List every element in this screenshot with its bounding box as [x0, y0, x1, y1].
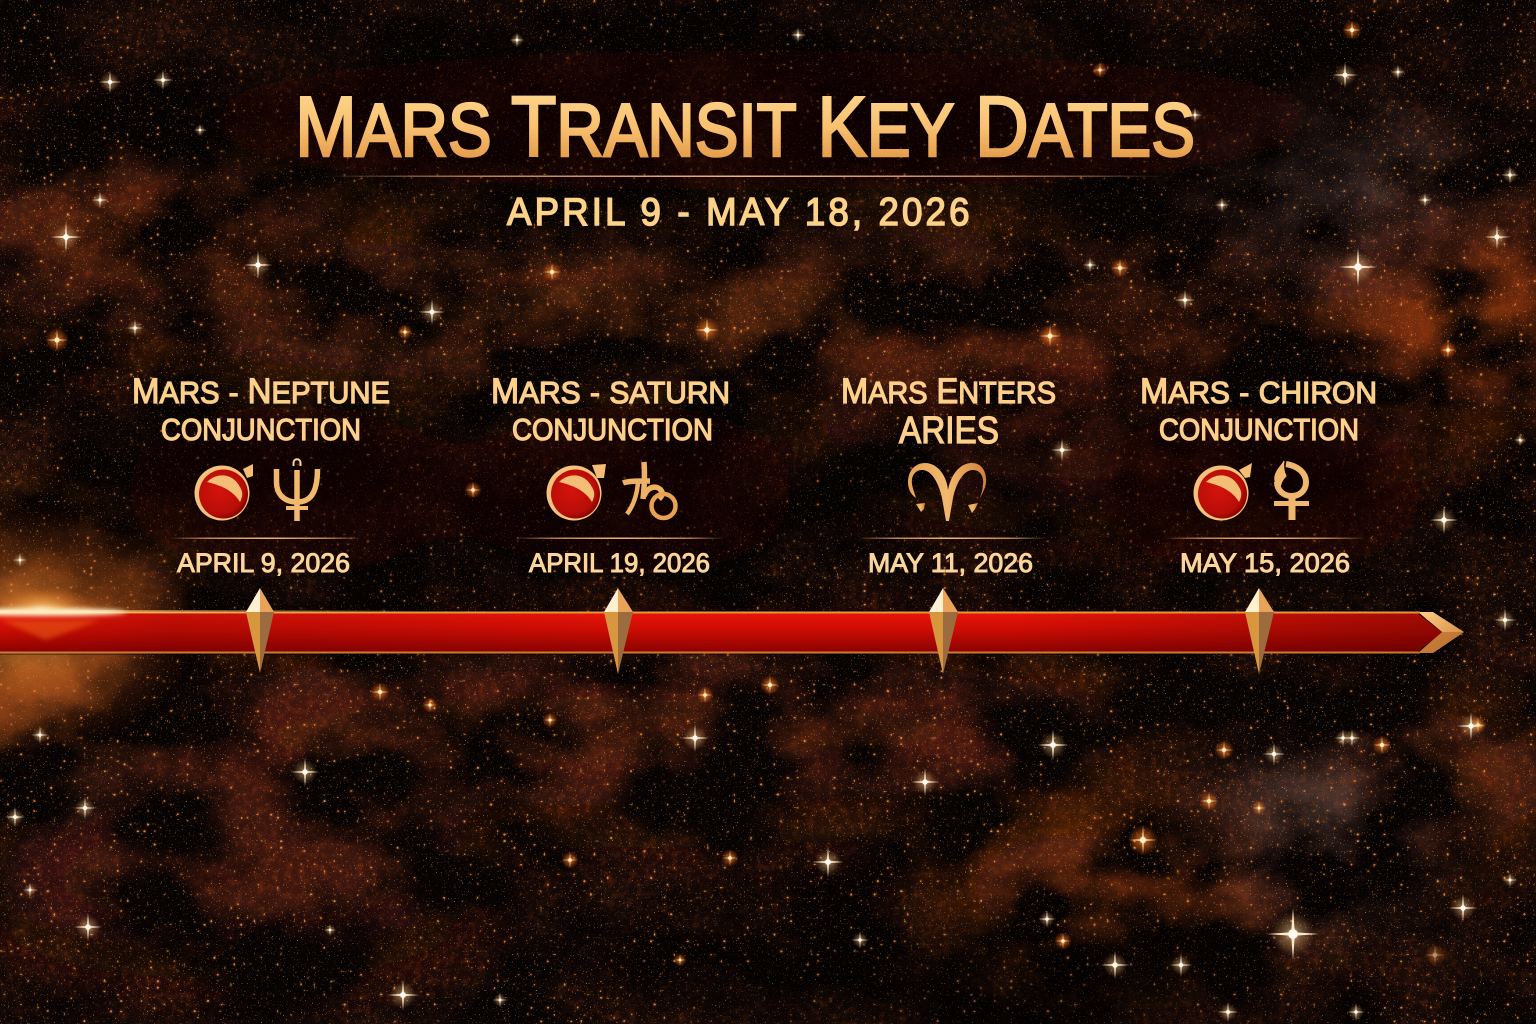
divider: [1165, 538, 1365, 539]
icon: Neptune trident: [276, 459, 318, 521]
heading: Mars - Chiron conjunction: [1140, 372, 1377, 447]
heading: Mars enters Aries: [841, 372, 1056, 452]
heading: Mars - Saturn conjunction: [491, 372, 730, 447]
heading: Mars enters Aries: MARS ENTERS: [841, 372, 1056, 411]
divider: [170, 538, 362, 539]
heading: Mars enters Aries: ARIES: [899, 410, 999, 452]
icon: Mars symbol: [1194, 463, 1252, 520]
heading: Mars - Saturn conjunction: MARS - SATURN: [491, 372, 730, 411]
marker: [1245, 588, 1274, 674]
icon: Mars symbol: [194, 464, 253, 520]
divider: [858, 538, 1046, 539]
heading: Mars - Saturn conjunction: CONJUNCTION: [512, 412, 713, 447]
milestone 4: Mars - Chiron: [1140, 372, 1377, 674]
heading: Mars - Neptune conjunction: MARS - NEPTUNE: [132, 372, 390, 411]
date: MAY 11, 2026: [868, 548, 1033, 578]
timeline arrow bar: [0, 608, 1464, 655]
heading: Mars - Neptune conjunction: [132, 372, 390, 447]
date: APRIL 9, 2026: [177, 548, 350, 578]
icon: Chiron symbol: [1274, 461, 1309, 520]
divider: [516, 538, 724, 539]
date: MAY 15, 2026: [1180, 548, 1350, 578]
icon: Saturn symbol: [623, 462, 676, 518]
icon: Aries symbol: [908, 463, 986, 521]
left light flare: [0, 503, 200, 753]
marker: [246, 588, 274, 673]
heading: Mars - Chiron conjunction: CONJUNCTION: [1159, 412, 1359, 447]
milestone 1: Mars - Neptune: [132, 372, 390, 673]
heading: Mars - Chiron conjunction: MARS - CHIRON: [1140, 372, 1377, 411]
title rule: [325, 176, 1165, 177]
milestone 2: Mars - Saturn: [491, 372, 730, 674]
milestone 3: Mars enters Aries: [841, 372, 1056, 674]
marker: [929, 588, 958, 674]
date: APRIL 19, 2026: [529, 548, 710, 578]
heading: Mars - Neptune conjunction: CONJUNCTION: [161, 412, 361, 447]
marker: [604, 588, 633, 674]
icon: Mars symbol: [546, 464, 606, 520]
title: MARS TRANSIT KEY DATES: [295, 80, 1195, 175]
date range subtitle: APRIL 9 - MAY 18, 2026: [507, 191, 969, 234]
